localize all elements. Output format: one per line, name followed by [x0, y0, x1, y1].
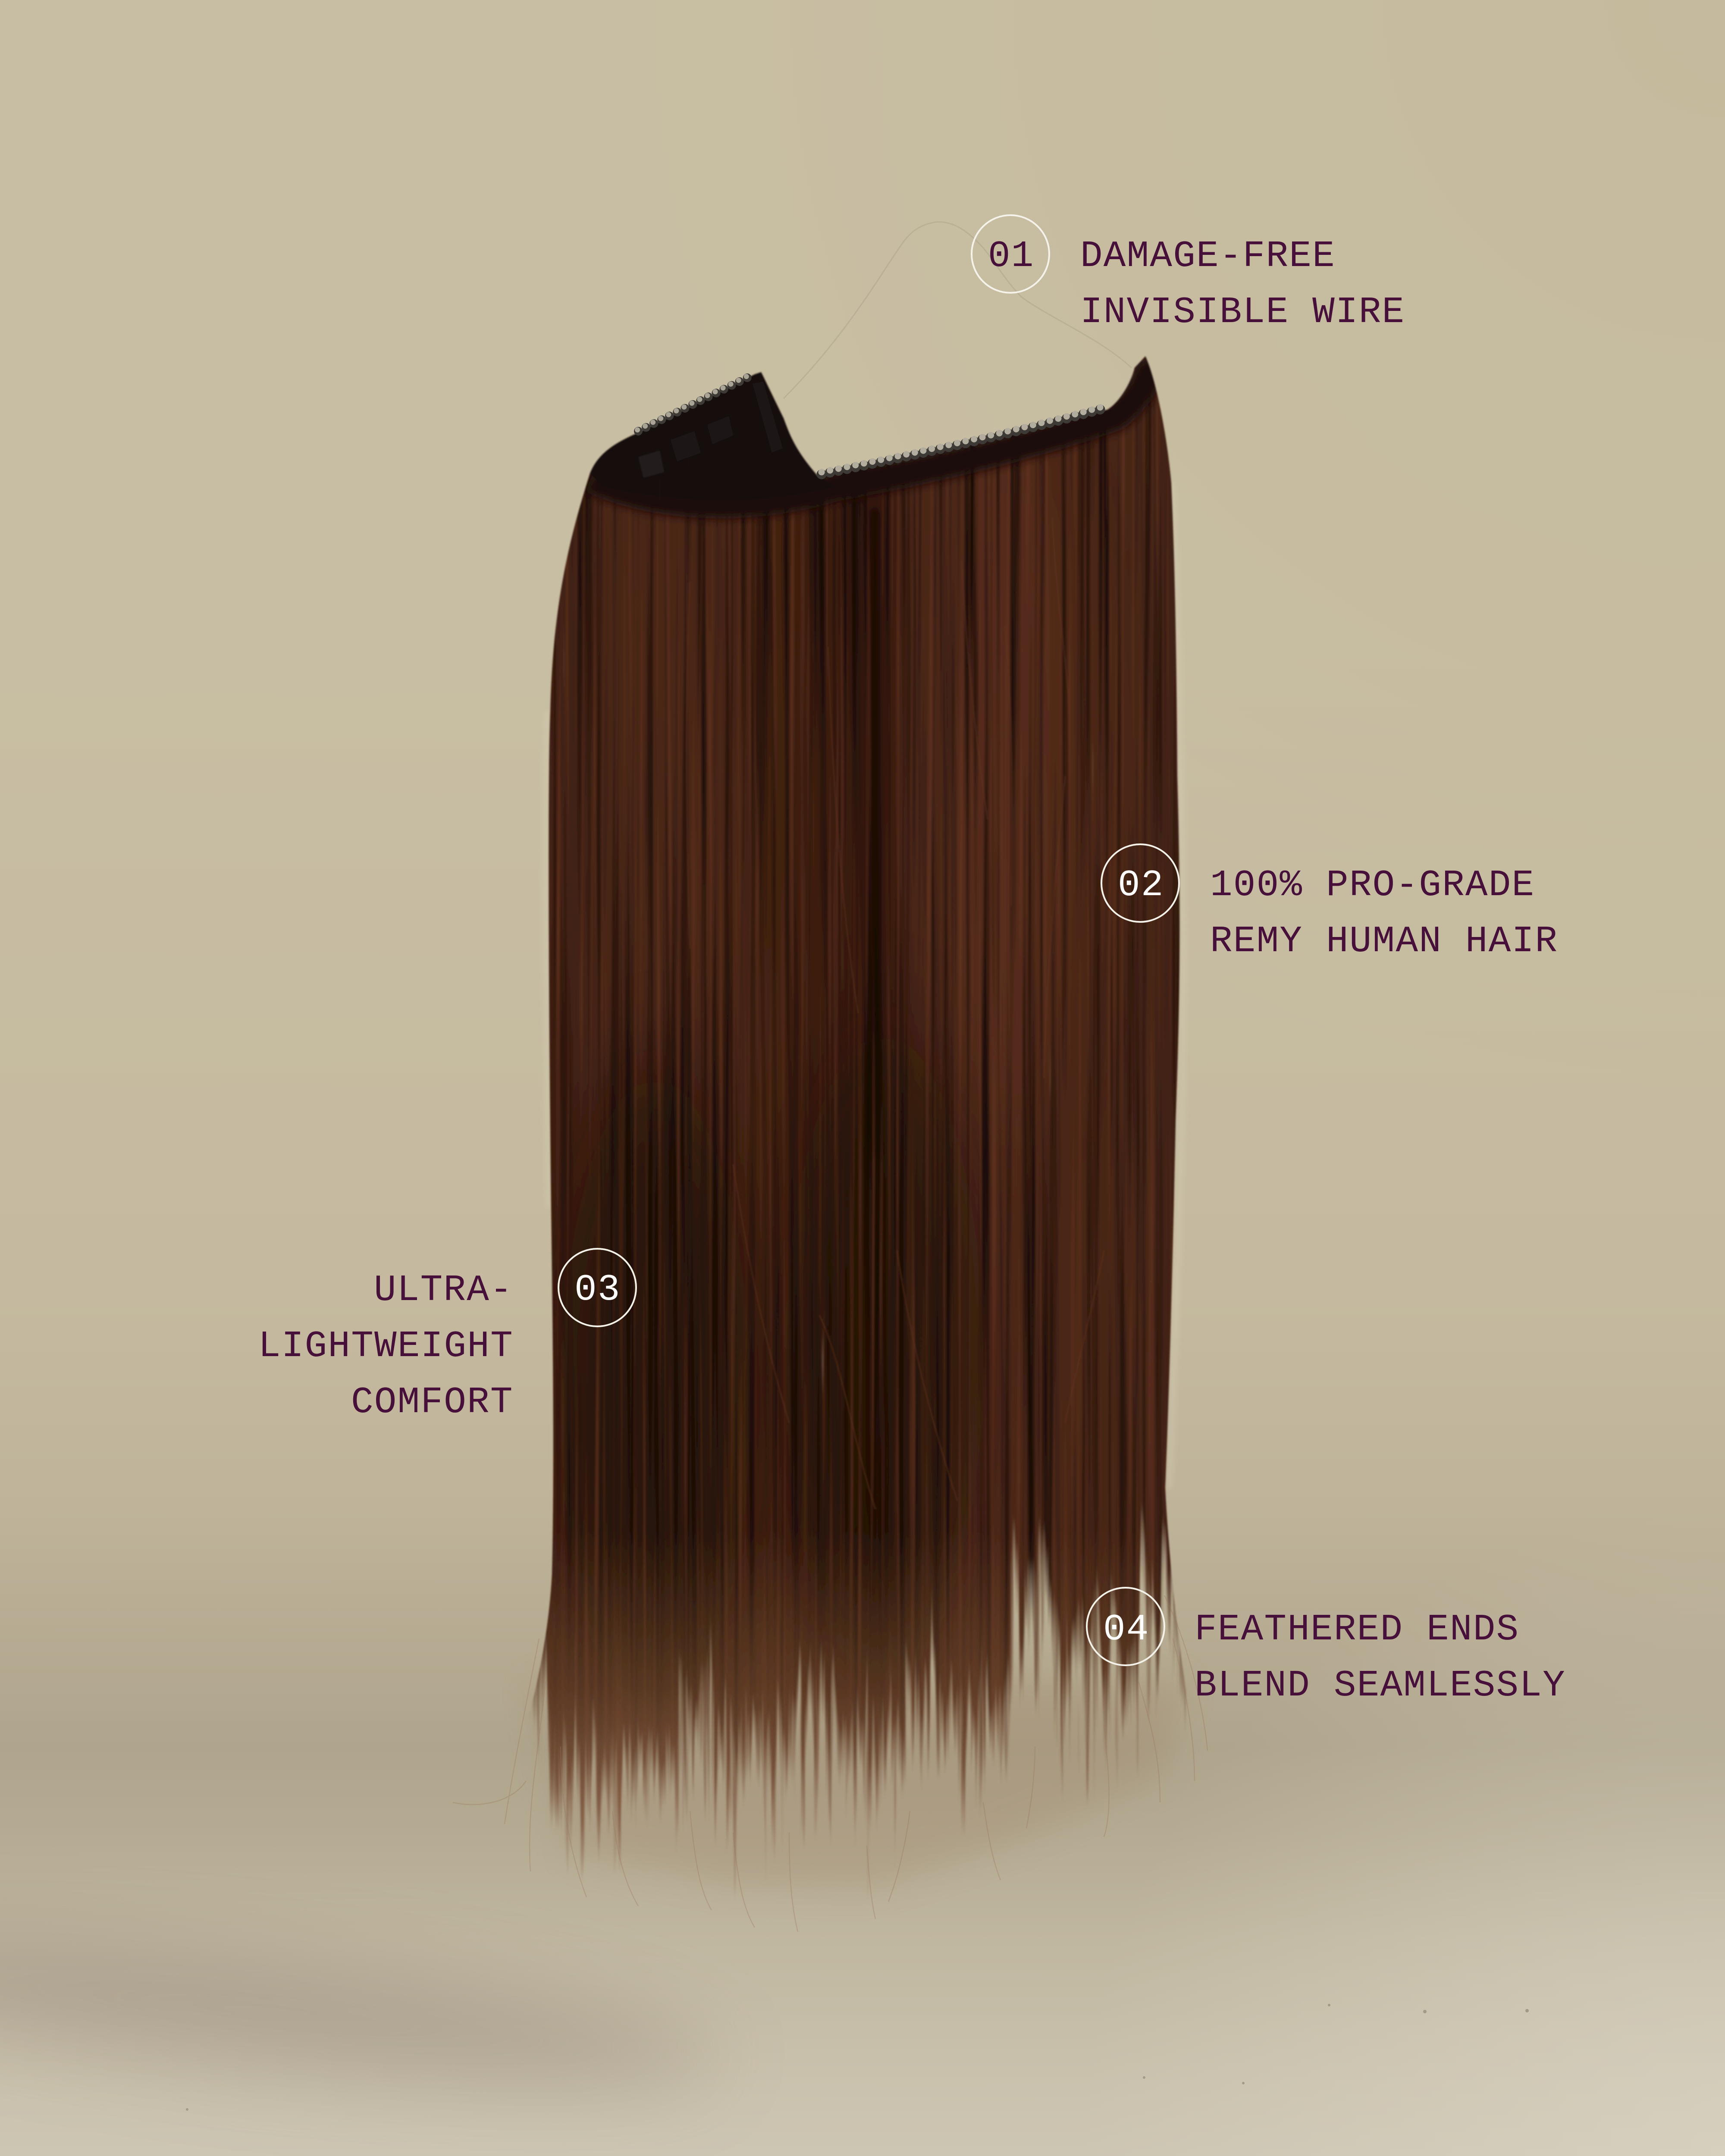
- angled strand highlights: [687, 517, 1104, 1509]
- callout 04: feathered ends blend seamlessly: 04: [1103, 1608, 1150, 1651]
- callout 02: 100% pro-grade remy human hair: REMY HUMAN HAIR: [1210, 920, 1558, 962]
- hair edge halo: [546, 483, 1184, 1488]
- callout 03: ultra-lightweight comfort: LIGHTWEIGHT: [258, 1325, 514, 1367]
- callout 03: ultra-lightweight comfort: [258, 1249, 636, 1423]
- callout 01: damage-free invisible wire: DAMAGE-FREE: [1080, 235, 1336, 277]
- callout 04: feathered ends blend seamlessly: BLEND SEAMLESSLY: [1195, 1664, 1566, 1707]
- lace bead edge: [637, 374, 1107, 474]
- callout 03: ultra-lightweight comfort: 03: [574, 1269, 621, 1311]
- feathered ends haze: [530, 1682, 1186, 1889]
- callout 01: damage-free invisible wire: 01: [988, 235, 1035, 277]
- callout 03: ultra-lightweight comfort: ULTRA-: [374, 1269, 513, 1311]
- callout 01: damage-free invisible wire: [972, 215, 1405, 333]
- invisible wire loop: [784, 222, 1132, 398]
- callout 04: feathered ends blend seamlessly: FEATHERED ENDS: [1195, 1608, 1519, 1651]
- callout 02: 100% pro-grade remy human hair: 02: [1118, 864, 1164, 906]
- callout 02: 100% pro-grade remy human hair: 100% PRO-GRADE: [1210, 864, 1535, 906]
- callout 03: ultra-lightweight comfort: COMFORT: [351, 1381, 514, 1423]
- callout 02: 100% pro-grade remy human hair: [1101, 844, 1558, 962]
- hair weft body: [532, 355, 1187, 1889]
- flyaway hair ends: [453, 1595, 1208, 1932]
- callout 01: damage-free invisible wire: INVISIBLE WIRE: [1080, 291, 1405, 333]
- black lace flap: [590, 372, 834, 500]
- weft seam band: [591, 362, 1154, 504]
- callout 04: feathered ends blend seamlessly: [1087, 1588, 1566, 1707]
